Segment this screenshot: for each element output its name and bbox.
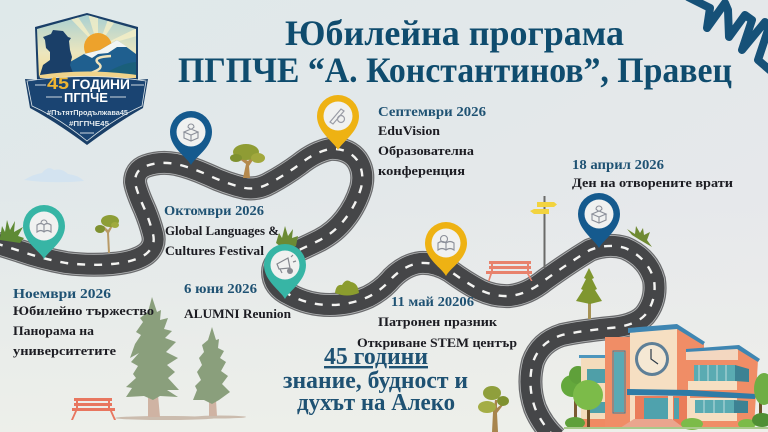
pin: 6 юни (teal) (264, 244, 306, 299)
pin: 18 април (blue) (578, 193, 620, 248)
title: Юбилейна програма (285, 13, 624, 53)
tree in front (573, 380, 603, 427)
logo text: #ПГПЧЕ45 (69, 121, 109, 128)
logo text (47, 74, 130, 128)
left wing (579, 355, 606, 428)
slogan (283, 344, 468, 416)
text: 18 април 2026: Ден на отворените врати (572, 175, 734, 190)
signpost (530, 196, 557, 268)
bush near road centre (276, 226, 298, 250)
text: Октомври 2026: Global Languages & (165, 223, 279, 238)
pin: Октомври (blue) (170, 111, 212, 165)
right tree and bushes (565, 373, 768, 430)
text: 6 юни 2026: ALUMNI Reunion (184, 306, 292, 321)
school building (561, 324, 768, 430)
tower (628, 324, 705, 391)
right wing (677, 328, 760, 428)
text: 18 април 2026: 18 април 2026 (572, 158, 664, 173)
tree bottom (478, 386, 509, 432)
text: Септември 2026: EduVision (378, 123, 441, 138)
pin: Септември (yellow) (317, 95, 359, 150)
text: Септември 2026: конференция (378, 163, 465, 178)
icon: megaphone (277, 255, 296, 273)
decorative squiggle top right (688, 0, 768, 72)
text: 6 юни 2026: 6 юни 2026 (184, 282, 257, 297)
slogan: знание, будност и (283, 368, 468, 394)
text: Октомври 2026: Cultures Festival (165, 243, 264, 258)
shrub (335, 281, 359, 296)
icon: pencil and gear (330, 109, 344, 124)
text: Ноември 2026 (13, 287, 154, 358)
clock (635, 342, 669, 376)
text: Септември 2026 (378, 105, 486, 178)
text: 18 април 2026 (572, 158, 734, 190)
logo text: ГОДИНИ (72, 76, 130, 92)
bench left (71, 398, 116, 420)
text: Ноември 2026: Ноември 2026 (13, 287, 111, 302)
text: Ноември 2026: университетите (13, 343, 116, 358)
logo text: #ПътятПродължава45 (47, 108, 128, 117)
text: 6 юни 2026 (184, 282, 292, 321)
fir tree small (193, 327, 246, 418)
bench right (486, 261, 532, 281)
text: Ноември 2026: Панорама на (13, 323, 95, 338)
canopy and entrance (620, 389, 756, 428)
bush: palm left (0, 220, 24, 243)
logo badge (25, 13, 148, 145)
ground (564, 427, 768, 429)
icon: box with bulb (184, 124, 198, 141)
title: ПГПЧЕ “А. Константинов”, Правец (178, 50, 732, 90)
text: Октомври 2026 (164, 204, 279, 258)
title (178, 13, 732, 90)
olive tree (230, 144, 265, 178)
logo text: ПГПЧЕ (64, 91, 108, 105)
cloud (24, 168, 84, 182)
text: 11 май 20206: Патронен празник (378, 314, 498, 329)
left trees (561, 366, 587, 422)
green fir tree (576, 268, 602, 319)
icon: box with bulb (592, 206, 606, 223)
pin: 11 май (yellow) (425, 222, 467, 276)
road (0, 149, 655, 432)
small tree left (95, 215, 119, 253)
text: 11 май 20206 (357, 295, 517, 350)
text: Октомври 2026: Октомври 2026 (164, 204, 264, 219)
pin: Ноември (teal) (23, 205, 65, 259)
slogan: духът на Алеко (297, 390, 455, 416)
slogan: 45 години (324, 344, 428, 370)
fir tree large (115, 297, 215, 420)
text: Септември 2026: Образователна (378, 143, 475, 158)
text: Ноември 2026: Юбилейно тържество (13, 303, 154, 318)
text: 11 май 20206: Откриване STEM център (357, 335, 517, 350)
text: Септември 2026: Септември 2026 (378, 105, 486, 120)
icon: book with magnifier (438, 242, 454, 250)
grass tuft right (627, 226, 652, 247)
logo text: 45 (47, 74, 69, 93)
orange tower (605, 337, 631, 428)
text: 11 май 20206: 11 май 20206 (391, 295, 474, 310)
icon: book (37, 220, 51, 232)
